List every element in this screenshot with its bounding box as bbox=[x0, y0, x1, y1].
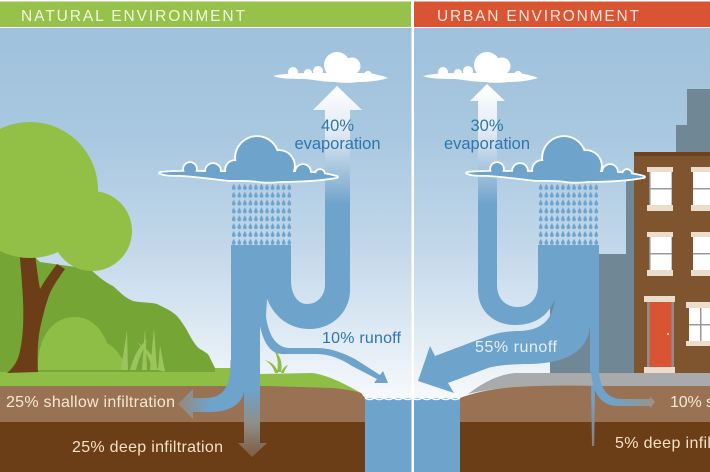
deep infiltration arrow bbox=[238, 390, 267, 457]
window row 2 left bbox=[647, 232, 673, 276]
urban rain cloud bbox=[467, 137, 644, 182]
shallow infiltration arrow bbox=[178, 360, 244, 419]
shallow stem arrow bbox=[591, 372, 655, 408]
natural water flow bbox=[178, 205, 388, 457]
header: urban environment bbox=[414, 2, 710, 27]
header: natural environment: NATURAL ENVIRONMENT bbox=[21, 8, 246, 25]
grass tuft large bbox=[121, 328, 165, 372]
label: 30% evaporation: evaporation bbox=[444, 135, 530, 153]
vertical divider bbox=[412, 0, 414, 472]
urban rain bbox=[538, 183, 598, 245]
label: 25% shallow infiltration: 25% shallow infiltration bbox=[6, 394, 175, 411]
hill and tree bbox=[0, 122, 215, 373]
deep stem arrow bbox=[591, 385, 595, 446]
water channel bbox=[365, 398, 460, 472]
natural evaporation arrow bbox=[313, 86, 362, 206]
brick building bbox=[634, 152, 710, 373]
window row 2 right bbox=[691, 232, 710, 276]
window row 3 right bbox=[686, 302, 710, 346]
natural rain cloud bbox=[160, 137, 337, 182]
window row 1 right bbox=[691, 167, 710, 211]
label: 10% runoff: 10% runoff bbox=[322, 330, 402, 347]
header: urban environment: URBAN ENVIRONMENT bbox=[437, 8, 640, 25]
sky background bbox=[0, 28, 710, 400]
label: 40% evaporation: 40% bbox=[321, 117, 354, 135]
natural white cloud bbox=[273, 52, 388, 83]
label: 25% deep infiltration: 25% deep infiltration bbox=[72, 439, 223, 456]
door bbox=[644, 296, 675, 373]
header: natural environment bbox=[0, 2, 411, 27]
urban white cloud bbox=[423, 52, 538, 83]
label: 55% runoff: 55% runoff bbox=[475, 339, 558, 356]
urban evaporation arrow bbox=[470, 84, 505, 206]
urban soil and pavement bbox=[460, 373, 710, 472]
label: 30% evaporation: 30% bbox=[470, 117, 504, 135]
natural landscape: ground and soil bbox=[0, 368, 365, 472]
window row 1 left bbox=[647, 167, 673, 211]
grass tuft small bbox=[265, 348, 288, 373]
urban gray background buildings bbox=[550, 89, 710, 374]
urban water flow bbox=[418, 205, 655, 446]
label: 40% evaporation: evaporation bbox=[294, 135, 380, 153]
natural rain bbox=[231, 183, 292, 245]
